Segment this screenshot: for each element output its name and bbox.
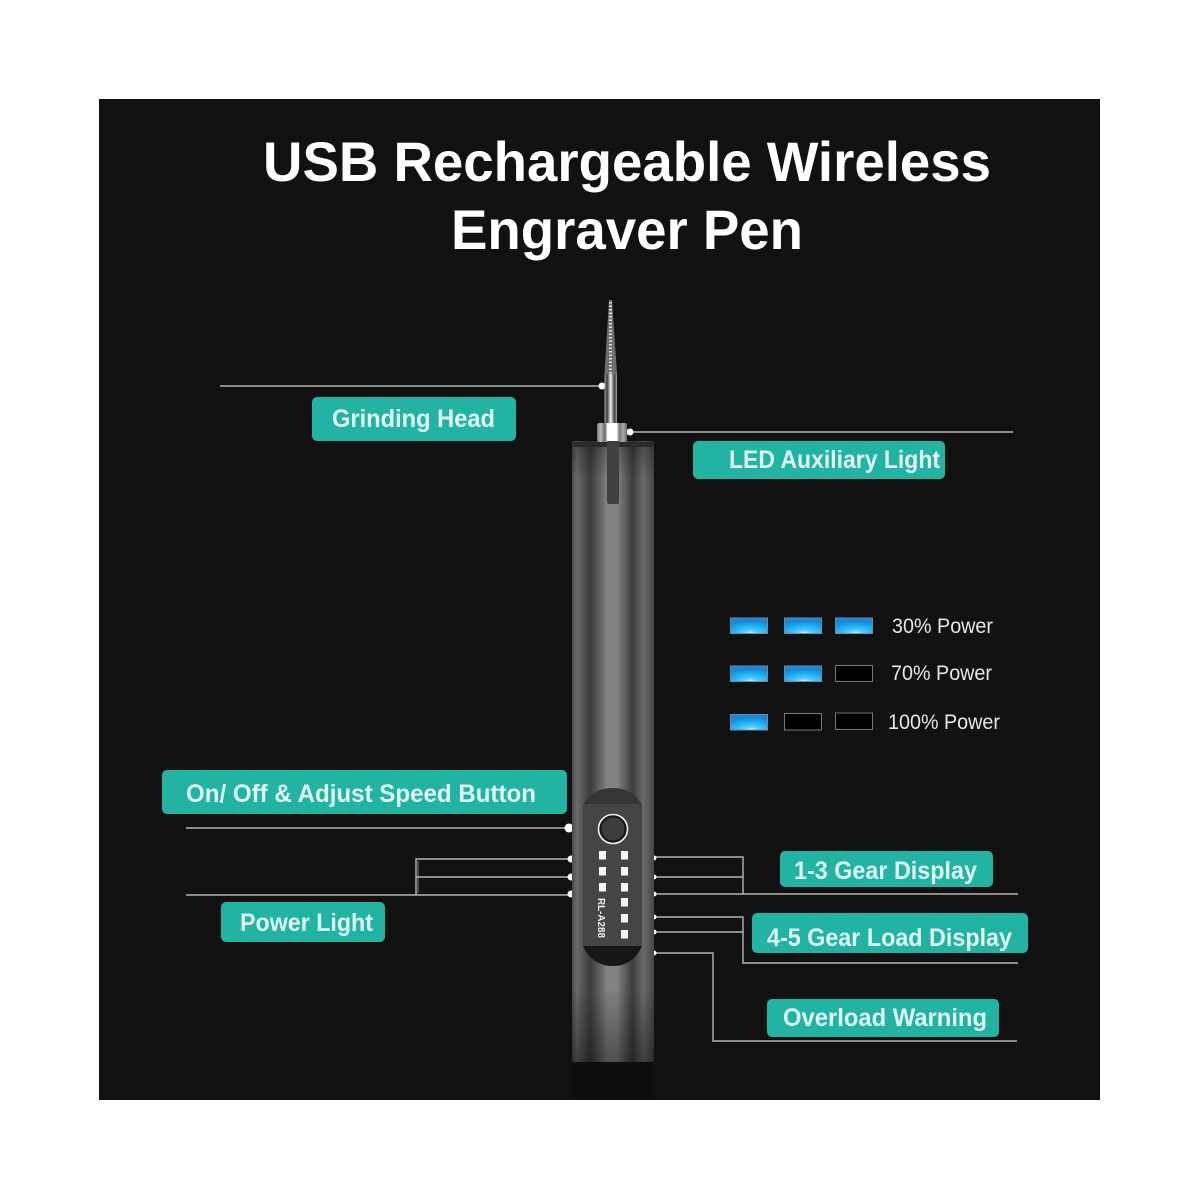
collar: [597, 423, 627, 442]
label: Power Light: Power Light: [240, 909, 374, 937]
grinding bit: [604, 300, 617, 424]
black background panel: [99, 99, 1100, 1100]
label: Overload Warning: [767, 999, 999, 1037]
leader line: grinding head: [220, 382, 606, 390]
label: 4-5 Gear Load Display: [752, 913, 1028, 953]
control panel: [583, 788, 642, 966]
row: 30% power: [730, 615, 993, 638]
label: 1-3 Gear Display: 1-3 Gear Display: [794, 857, 977, 885]
model number: RL-A288: [595, 898, 606, 938]
power button: [598, 814, 628, 844]
engraver pen: [572, 300, 654, 1100]
title: [263, 130, 991, 261]
leader line: overload warning: [652, 950, 1017, 1041]
label: On/Off and Adjust Speed Button: [162, 770, 567, 814]
label: Power Light: [221, 902, 385, 942]
leader line: LED light: [626, 428, 1013, 436]
row: 100% power: [730, 711, 1000, 734]
pen shadow stub: [573, 1062, 652, 1100]
leader lines: left side power light: [186, 856, 574, 898]
title: Engraver Pen: [451, 198, 803, 261]
label: Overload Warning: Overload Warning: [783, 1004, 987, 1032]
pen body: [572, 441, 654, 1062]
left LEDs: [599, 851, 606, 892]
title: USB Rechargeable Wireless: [263, 130, 991, 193]
label: 4-5 Gear Load Display: 4-5 Gear Load Display: [767, 924, 1012, 952]
right LEDs: [621, 851, 628, 938]
label: Grinding Head: Grinding Head: [332, 405, 495, 433]
leader lines: 1-3 gear display: [652, 856, 1018, 896]
row: 70% power: 70% Power: [891, 662, 992, 685]
row: 70% power: [730, 662, 992, 685]
leader line: on/off button: [186, 824, 574, 832]
label: On/Off and Adjust Speed Button: On/ Off & Adjust Speed Button: [186, 780, 536, 808]
row: 100% power: 100% Power: [888, 711, 1000, 734]
label: Grinding Head: [312, 397, 516, 441]
slot: [607, 441, 619, 504]
power legend: [730, 615, 1000, 734]
label: LED Auxiliary Light: [693, 441, 945, 479]
label: LED Auxiliary Light: LED Auxiliary Light: [729, 446, 941, 474]
row: 30% power: 30% Power: [892, 615, 993, 638]
leader lines: 4-5 gear load display: [652, 914, 1018, 963]
